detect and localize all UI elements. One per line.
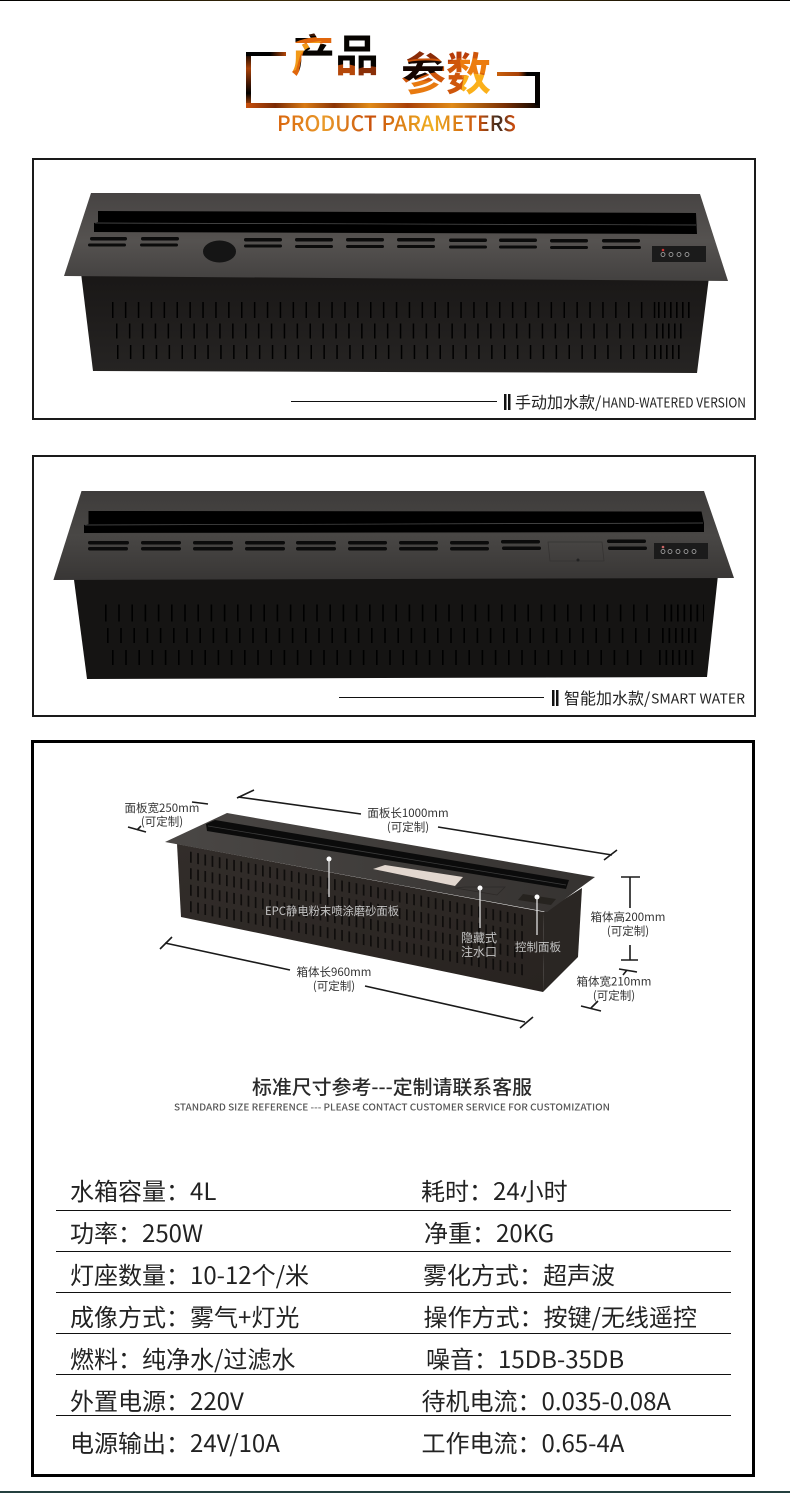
bottom edge strip [0,1491,790,1493]
dimension: box height: 箱体高200mm [591,909,665,925]
panel: dimensions and specifications [32,742,754,1476]
control panel [654,543,708,559]
dimension: box width [577,969,651,1011]
caption text: 智能加水款/ [564,685,651,709]
dimension diagram [125,790,665,1028]
title frame [246,52,540,108]
caption line [339,696,544,698]
caption marker [552,690,558,706]
dimension: panel width: 面板宽250mm [125,800,199,816]
spec rows: 噪音：15DB-35DB [426,1340,624,1375]
spec rows: 电源输出：24V/10A [70,1424,280,1459]
dimension: box width: (可定制) [593,988,635,1004]
product photo: hand-watered [64,193,728,373]
sticker [373,865,463,886]
callout: hidden water inlet [461,886,497,960]
callout: EPC panel: EPC静电粉末喷涂磨砂面板 [265,903,399,919]
heading: standard size reference: 标准尺寸参考---定制请联系客服 [252,1071,533,1100]
title chinese [291,20,491,103]
top panel [165,813,595,912]
spec rows: 待机电流：0.035-0.08A [422,1382,671,1417]
caption text [515,389,746,413]
dimension: box length: 箱体长960mm [297,964,371,980]
flame slot [84,511,704,533]
dimension: panel length: (可定制) [387,819,429,835]
heading: standard size reference [174,1071,610,1114]
specification table [56,1172,731,1459]
vents [88,540,647,550]
product photo: smart water [53,491,734,679]
caption line [291,400,497,402]
heading: standard size reference: STANDARD SIZE REFERENCE --- PLEASE CONTACT CUSTOMER SERVICE FOR CUSTOMIZATION [174,1100,610,1114]
hatch and controls [455,887,556,905]
slot highlight [208,826,566,885]
title chinese: 参数 [401,38,491,103]
spec rows: 工作电流：0.65-4A [422,1424,625,1459]
knob [203,240,236,262]
side slits [105,613,704,658]
dimension: box length: (可定制) [313,978,355,994]
water hatch [548,542,604,562]
callout: hidden water inlet: 隐藏式 [461,929,497,946]
spec rows: 净重：20KG [424,1214,554,1249]
caption text: HAND-WATERED VERSION [602,392,746,412]
dimension: panel width [125,800,208,832]
flame slot [94,211,697,234]
spec rows: 水箱容量：4L [70,1172,216,1207]
box body front [177,844,544,992]
callout: EPC panel [265,856,399,919]
title: product parameters [246,20,540,138]
callout: hidden water inlet: 注水口 [461,943,497,960]
box body side [543,888,582,992]
top edge strip [0,0,790,1]
dimension: box height: (可定制) [607,923,649,939]
spec rows [70,1172,697,1459]
dimension: panel length [237,790,617,860]
title chinese: 产品 [291,20,379,84]
spec rows: 外置电源：220V [70,1382,244,1417]
dimension: box length [160,937,533,1028]
callout: control panel [515,894,561,955]
dimension: box height [591,877,665,960]
vents [88,237,641,249]
title english: PRODUCT PARAMETERS [277,108,516,138]
callout: control panel: 控制面板 [515,939,561,955]
spec rows: 灯座数量：10-12个/米 [70,1256,309,1291]
spec rows: 耗时：24小时 [421,1172,568,1207]
spec rows: 操作方式：按键/无线遥控 [424,1298,697,1333]
caption text [564,685,745,709]
panel: smart water version [33,456,755,716]
spec rows: 成像方式：雾气+灯光 [70,1298,299,1333]
flame slot [206,820,569,889]
dimension: box width: 箱体宽210mm [577,974,651,990]
spec rows: 燃料：纯净水/过滤水 [70,1340,295,1375]
caption text: SMART WATER [651,688,745,708]
dimension: panel width: (可定制) [141,814,183,830]
dimension: panel length: 面板长1000mm [367,805,449,821]
side slits [112,310,690,352]
box body slits [190,857,528,971]
caption text: 手动加水款/ [515,389,602,413]
panel: hand-watered version [33,159,755,419]
caption marker [504,394,510,410]
row dividers [56,1210,731,1416]
spec rows: 功率：250W [70,1214,203,1249]
spec rows: 雾化方式：超声波 [423,1256,615,1291]
control panel [652,246,706,262]
